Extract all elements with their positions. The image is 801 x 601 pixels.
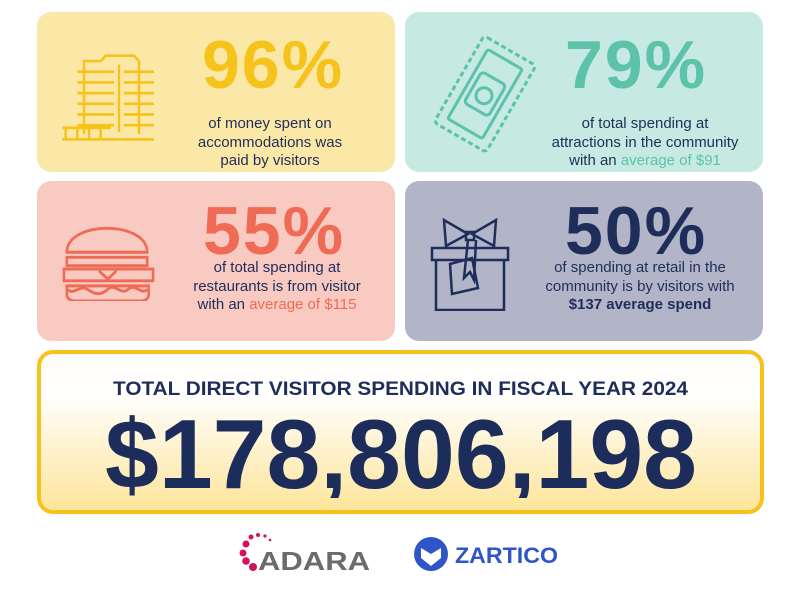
icon: hotel building: [62, 54, 154, 141]
text: restaurants: [193, 259, 361, 313]
icon: gift box: [430, 218, 510, 311]
text: attractions: [552, 115, 738, 169]
text: retail: $137 average spend: [569, 296, 711, 313]
panel: retail: [405, 181, 763, 341]
text: accommodations: of money spent on: [208, 115, 332, 132]
panel: total spending: [37, 350, 764, 514]
stat 79%: 79%: [565, 27, 707, 103]
text: retail: of spending at retail in the: [554, 259, 726, 276]
panel: accommodations: [37, 12, 395, 172]
stat 50%: 50%: [565, 193, 707, 269]
text: restaurants: of total spending at: [214, 259, 340, 276]
text: attractions: with an average of $91: [569, 152, 721, 169]
text: accommodations: accommodations was: [198, 134, 342, 150]
logo: ADARA: [240, 533, 370, 572]
icon: burger: [62, 226, 154, 301]
logo: ZARTICO: [414, 537, 558, 571]
panel: attractions: [405, 12, 763, 172]
stat 55%: 55%: [203, 193, 345, 269]
text: restaurants: with an average of $115: [197, 296, 356, 313]
panel: restaurants: [37, 181, 395, 341]
text: accommodations: [198, 115, 342, 169]
text: retail: community is by visitors with: [545, 278, 735, 294]
text: attractions: of total spending at: [582, 115, 708, 132]
heading: total spending: TOTAL DIRECT VISITOR SPENDING IN FISCAL YEAR 2024: [113, 378, 688, 400]
stat 96%: 96%: [202, 27, 344, 103]
text: retail: [545, 259, 735, 313]
logo: ZARTICO: ZARTICO: [455, 543, 558, 568]
text: accommodations: paid by visitors: [220, 152, 320, 169]
text: attractions: attractions in the community: [552, 134, 738, 150]
text: restaurants: restaurants is from visitor: [193, 278, 361, 294]
icon: ticket: [434, 36, 536, 152]
